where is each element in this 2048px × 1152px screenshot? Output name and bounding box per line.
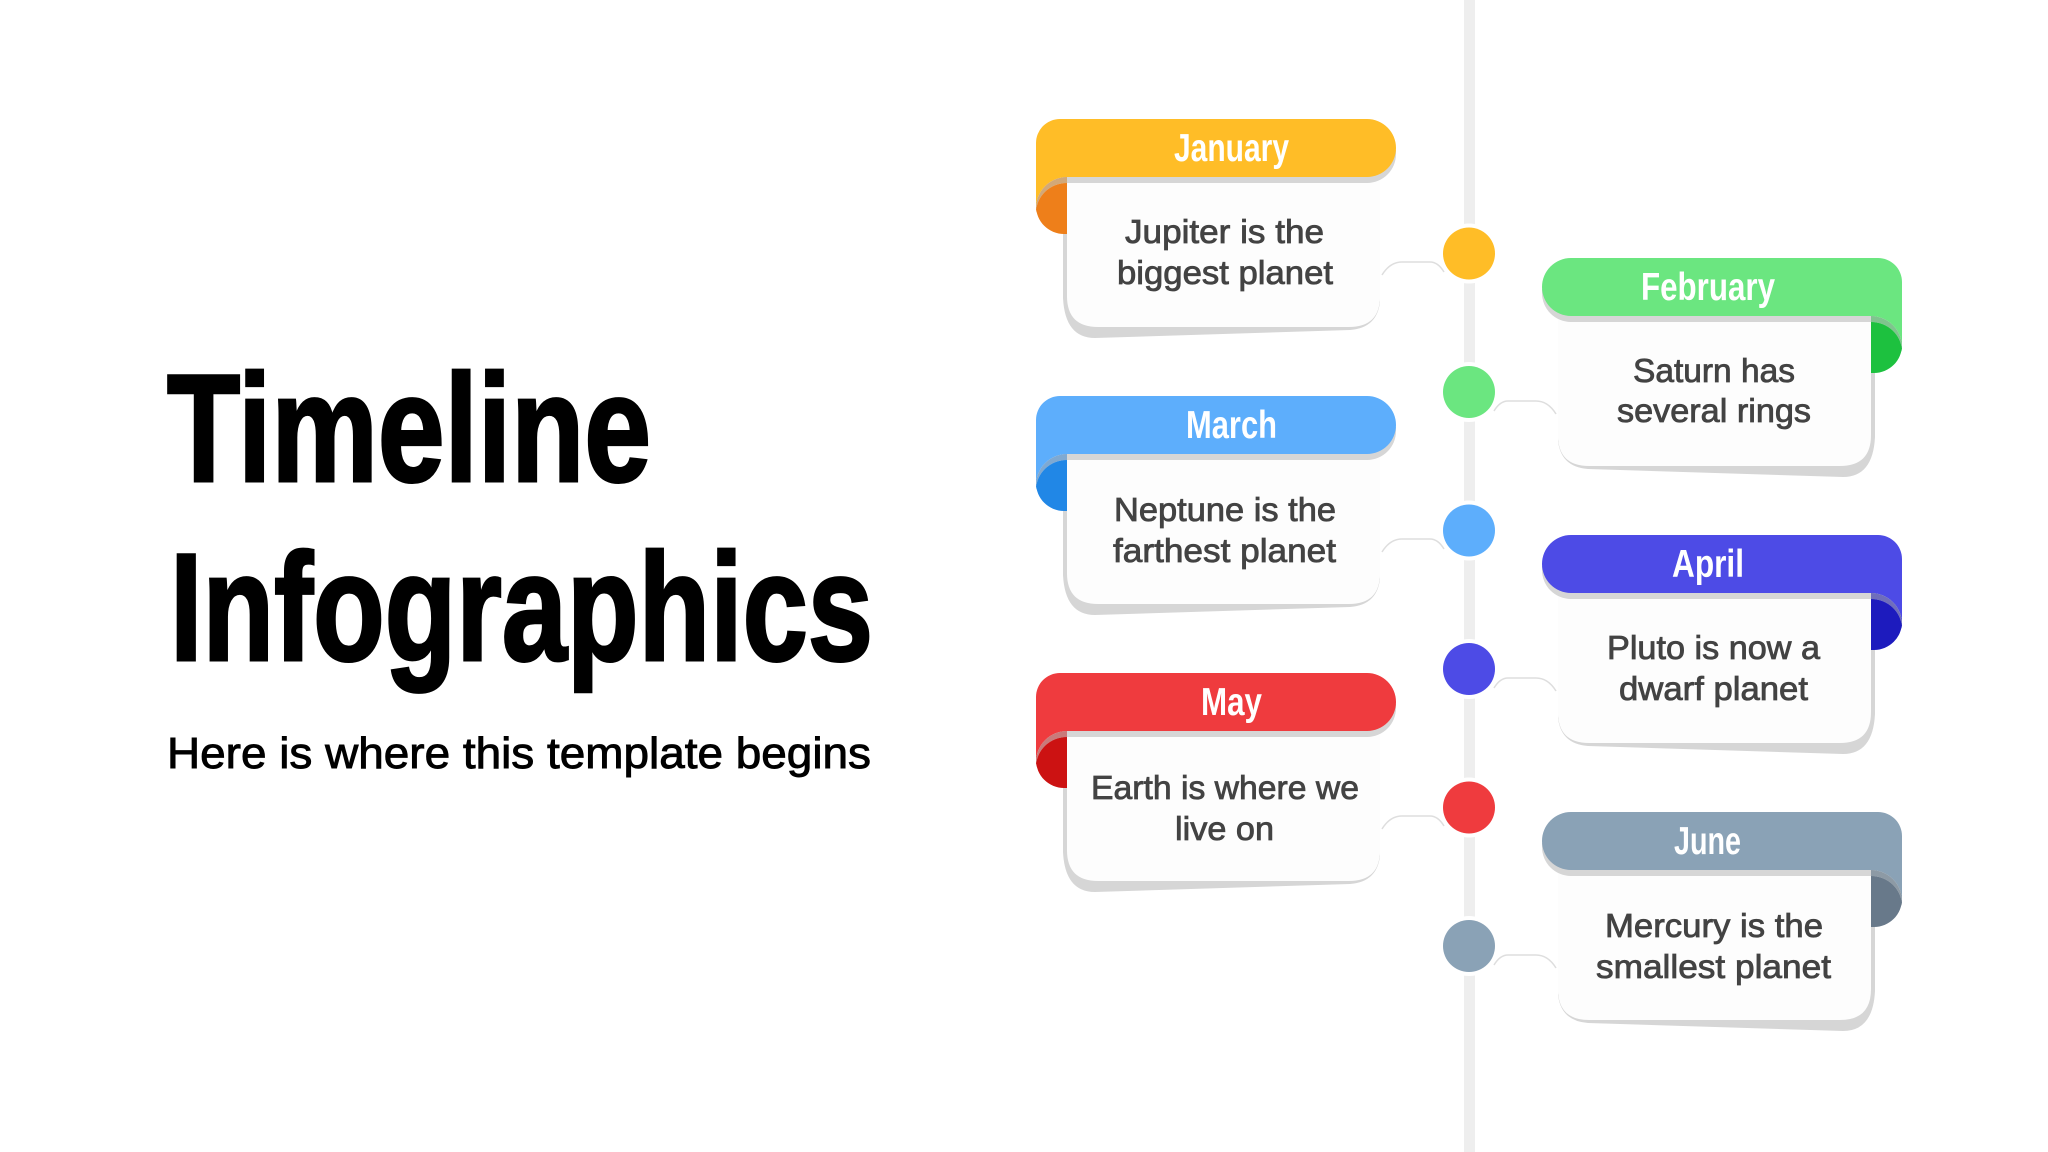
description xyxy=(1617,352,1811,429)
description: farthest planet xyxy=(1113,532,1336,569)
card: April xyxy=(1494,535,1902,754)
description: dwarf planet xyxy=(1619,670,1808,707)
connector xyxy=(1494,401,1556,414)
card: February xyxy=(1494,258,1902,477)
month label: April xyxy=(1672,543,1744,586)
description: several rings xyxy=(1617,392,1811,429)
description: Neptune is the xyxy=(1114,491,1336,528)
description: Earth is where we xyxy=(1091,769,1359,806)
marker: May xyxy=(1439,778,1499,838)
description: Pluto is now a xyxy=(1607,629,1821,666)
month label: March xyxy=(1186,404,1277,447)
description xyxy=(1117,213,1333,291)
title: Infographics xyxy=(170,522,873,693)
month label: May xyxy=(1201,681,1262,724)
marker: January xyxy=(1439,224,1499,284)
ribbon xyxy=(1036,396,1396,511)
ribbon xyxy=(1542,258,1902,373)
subtitle: Here is where this template begins xyxy=(167,729,871,778)
card body xyxy=(1063,447,1380,615)
card body xyxy=(1063,170,1380,338)
ribbon xyxy=(1542,812,1902,927)
month label: June xyxy=(1674,820,1741,863)
connector xyxy=(1494,955,1556,968)
card: June xyxy=(1494,812,1902,1031)
description: Mercury is the xyxy=(1605,907,1823,944)
card: May xyxy=(1036,673,1444,892)
card: March xyxy=(1036,396,1444,615)
month label: January xyxy=(1174,127,1289,170)
month label: February xyxy=(1641,266,1775,309)
description xyxy=(1607,629,1821,707)
marker: April xyxy=(1439,639,1499,699)
description: biggest planet xyxy=(1117,254,1333,291)
card body xyxy=(1558,309,1875,477)
ribbon xyxy=(1036,673,1396,788)
description: Saturn has xyxy=(1633,352,1795,389)
description xyxy=(1596,907,1831,985)
card body xyxy=(1558,863,1875,1031)
card body xyxy=(1063,724,1380,892)
description: Jupiter is the xyxy=(1125,213,1324,250)
marker: March xyxy=(1439,500,1499,560)
connector xyxy=(1382,539,1444,552)
ribbon xyxy=(1036,119,1396,234)
card body xyxy=(1558,586,1875,754)
card: January xyxy=(1036,119,1444,338)
description: live on xyxy=(1175,810,1274,847)
description: smallest planet xyxy=(1596,948,1831,985)
title xyxy=(167,343,873,693)
description xyxy=(1091,769,1359,847)
marker: February xyxy=(1439,362,1499,422)
marker: June xyxy=(1439,916,1499,976)
timeline spine xyxy=(1464,0,1475,1152)
connector xyxy=(1382,816,1444,829)
connector xyxy=(1382,262,1444,275)
connector xyxy=(1494,678,1556,691)
description xyxy=(1113,491,1336,569)
ribbon xyxy=(1542,535,1902,650)
title: Timeline xyxy=(167,343,651,514)
